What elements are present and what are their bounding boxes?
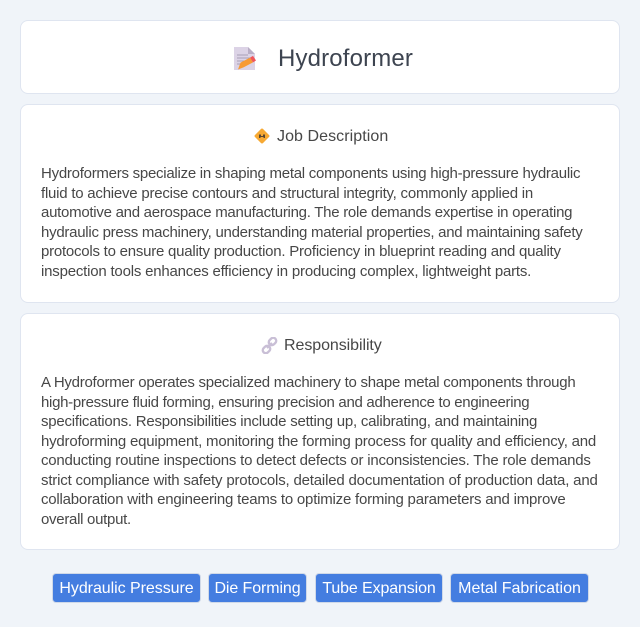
text block: job description: hydraulic press machinery, understanding material properties, and maintaining safety: [41, 224, 583, 241]
tag: Tube Expansion: Tube Expansion: [322, 580, 436, 597]
icon: chain link: [262, 337, 278, 354]
text block: responsibility: [41, 374, 598, 528]
tag: Die Forming: [208, 573, 307, 603]
heading: job description: Job Description: [277, 128, 388, 145]
heading: responsibility: Responsibility: [284, 337, 382, 354]
text block: job description: inspection tools enhances efficiency in producing complex, lightweight parts.: [41, 263, 531, 280]
text block: responsibility: overall output.: [41, 511, 131, 528]
icon: diamond road sign: [254, 128, 270, 144]
tag: Hydraulic Pressure: Hydraulic Pressure: [59, 580, 194, 597]
text block: job description: [41, 165, 583, 280]
text block: responsibility: high-pressure fluid forming, ensuring precision and adherence to engineering: [41, 394, 529, 411]
panel: job description: [20, 104, 620, 303]
text block: job description: protocols to ensure quality production. Proficiency in blueprint reading and quality: [41, 243, 561, 260]
text block: responsibility: A Hydroformer operates specialized machinery to shape metal components through: [41, 374, 575, 391]
text block: responsibility: specifications. Responsibilities include setting up, calibrating, and maintaining: [41, 413, 537, 430]
text block: responsibility: strict compliance with safety protocols, detailed documentation of production data, and: [41, 472, 598, 489]
tag: Hydraulic Pressure: [52, 573, 201, 603]
tag: Tube Expansion: [315, 573, 443, 603]
tag: Die Forming: Die Forming: [214, 580, 301, 597]
text block: responsibility: hydroforming equipment, monitoring the forming process for quality and efficiency, and: [41, 433, 596, 450]
text block: responsibility: conducting routine inspections to detect defects or inconsistencies. The role demands: [41, 452, 591, 469]
tag: Metal Fabrication: [450, 573, 589, 603]
icon: document with pencil: [234, 47, 256, 70]
title: Hydroformer: [278, 45, 413, 72]
text block: responsibility: collaboration with engineering teams to optimize forming parameters and improve: [41, 491, 566, 508]
text block: job description: automotive and aerospace manufacturing. The role demands expertise in operating: [41, 204, 572, 221]
text block: job description: fluid to achieve precise contours and structural integrity, commonly applied in: [41, 185, 533, 202]
panel: title card: [20, 20, 620, 94]
panel: responsibility: [20, 313, 620, 550]
tag: Metal Fabrication: Metal Fabrication: [458, 580, 581, 597]
text block: job description: Hydroformers specialize in shaping metal components using high-pressure hydraulic: [41, 165, 580, 182]
